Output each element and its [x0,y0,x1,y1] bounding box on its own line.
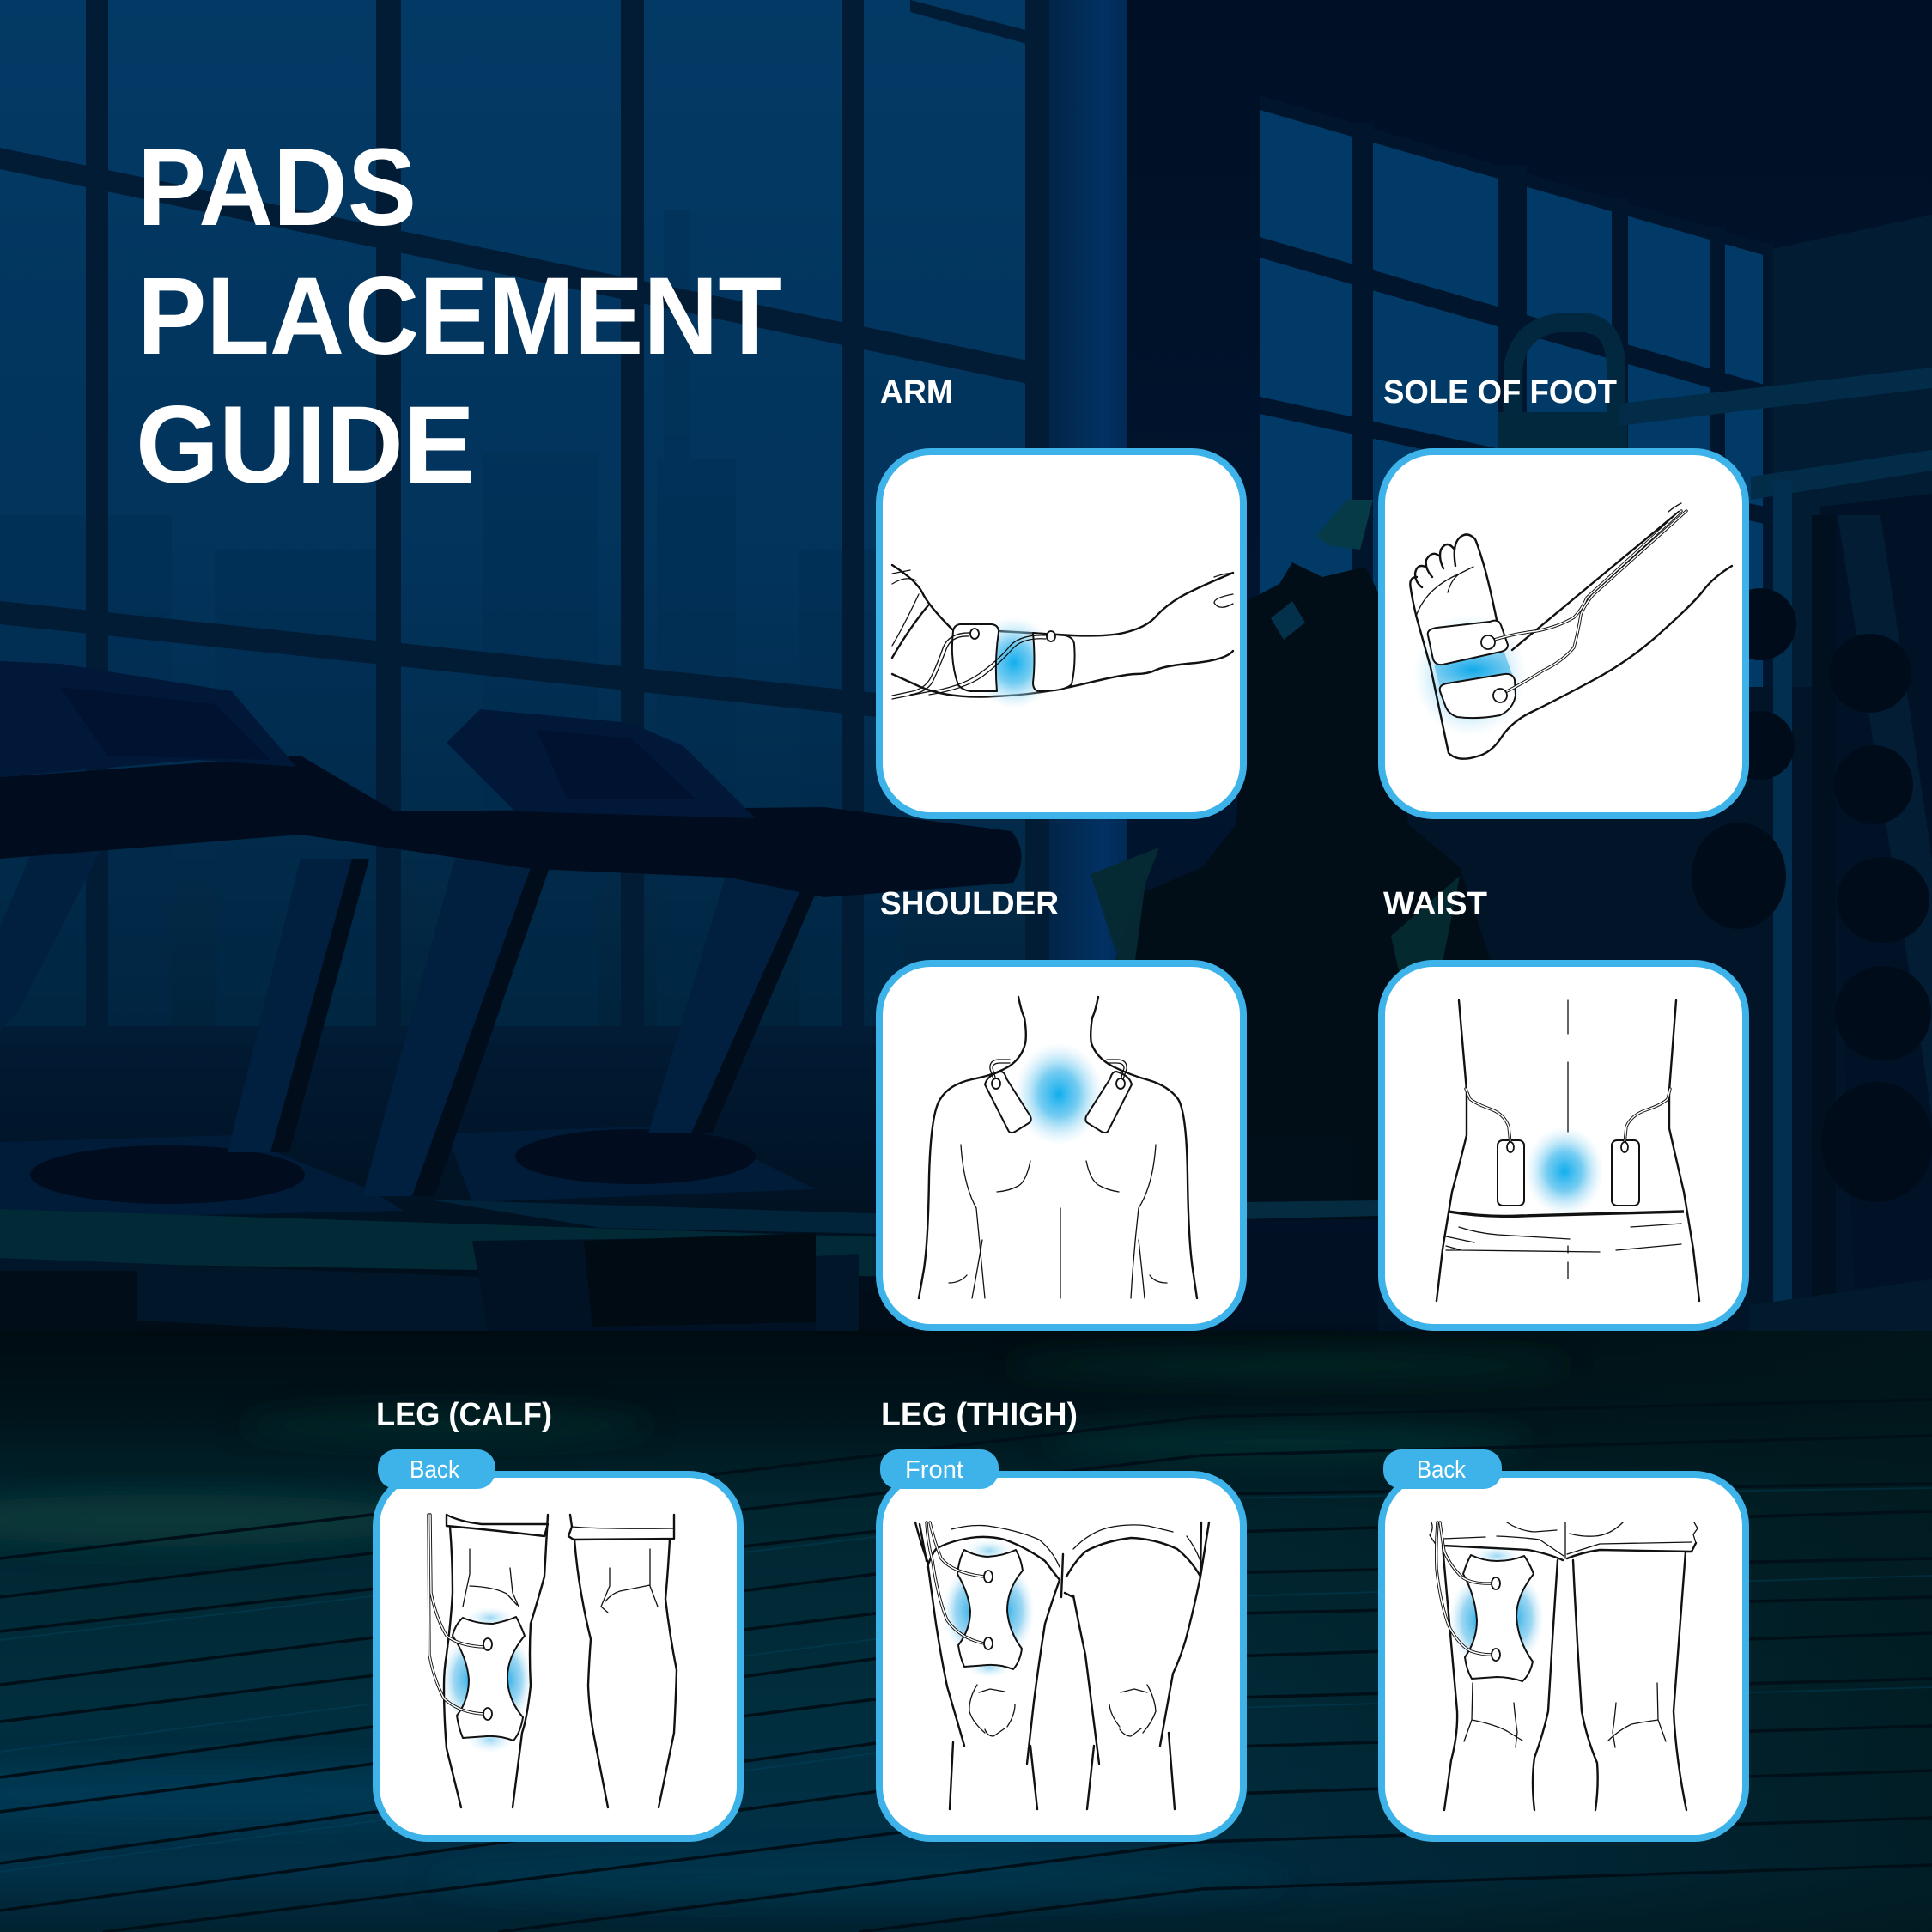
title: GUIDE [136,384,475,507]
plant silhouette [1091,500,1494,1219]
title: PLACEMENT [137,255,781,378]
panel: sole of foot: SOLE OF FOOT [1383,374,1617,410]
wooden floor [0,1331,1932,1932]
tab: front: Front [905,1456,963,1484]
panel: waist: WAIST [1383,886,1487,922]
tab: back: Back [410,1456,459,1484]
panel: sole of foot [1382,374,1746,816]
gym machine and rack [1378,323,1932,1348]
panel: shoulder: SHOULDER [880,886,1059,922]
panel: leg calf [376,1397,740,1838]
treadmills [0,661,1202,1393]
panel: arm [879,374,1243,816]
title: PADS [137,126,416,249]
tab: front [880,1449,999,1489]
tab: back [1383,1449,1502,1489]
right windows [1260,95,1773,810]
panel: waist [1382,886,1746,1327]
title [136,126,781,507]
tab: back: Back [1417,1456,1466,1484]
tab: back [378,1449,495,1489]
panel: leg thigh front: LEG (THIGH) [881,1397,1078,1433]
panel: leg thigh back [1382,1449,1746,1838]
panel: arm: ARM [880,374,953,410]
panel: leg thigh front [879,1397,1243,1838]
panel: shoulder [879,886,1243,1327]
panel: leg calf: LEG (CALF) [376,1397,552,1433]
